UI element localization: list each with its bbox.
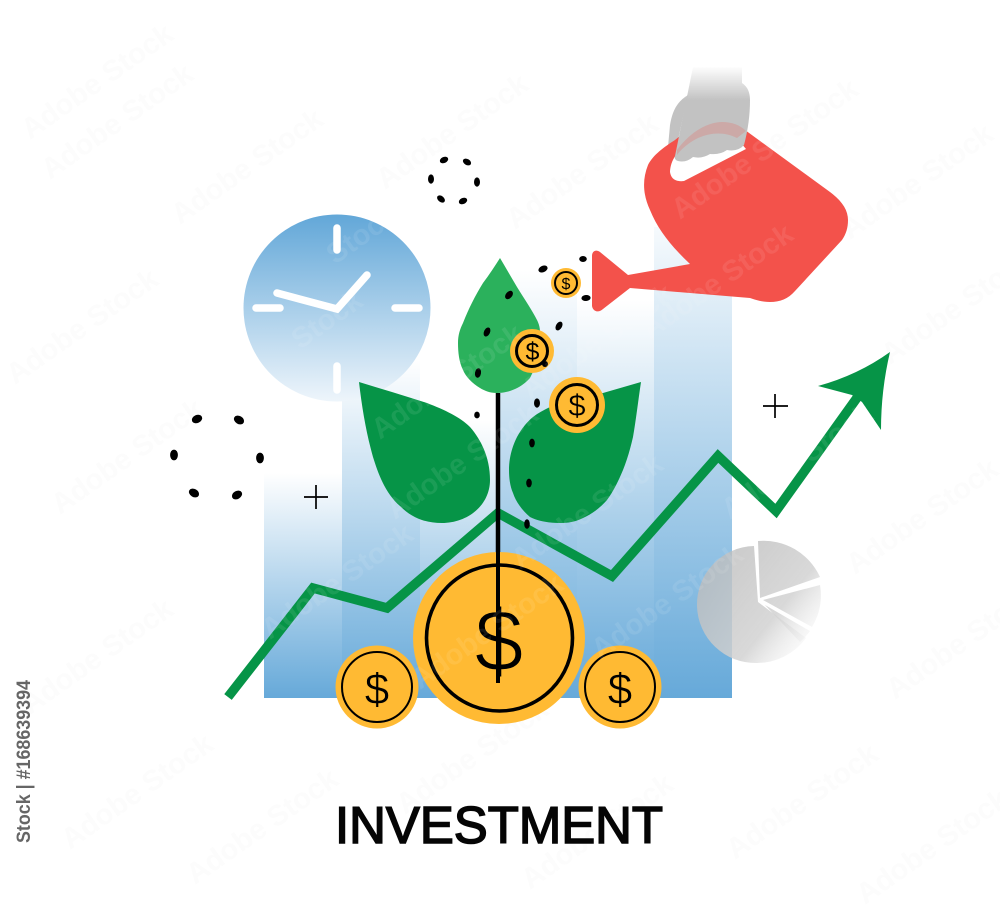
top leaf — [458, 258, 540, 393]
plant stem — [496, 393, 500, 560]
watermark: faint stock marks on background: Adobe Stock — [46, 392, 210, 521]
watermark: faint stock marks over artwork: Adobe Stock — [666, 97, 830, 226]
growth arrow line chart — [228, 352, 890, 697]
bar chart backdrop — [264, 227, 732, 698]
icon: pie chart — [697, 541, 821, 663]
watermark: faint stock marks over artwork: Adobe Stock — [716, 397, 880, 526]
hand gripping handle — [675, 67, 750, 162]
watermark: faint stock marks on background: Adobe Stock — [841, 452, 1000, 581]
icon: small coin right: $ — [608, 665, 632, 714]
watermark: faint stock marks on background: Adobe Stock — [836, 117, 1000, 246]
watermark: faint stock marks over artwork: Stock — [286, 284, 369, 356]
icon: falling coin small: $ — [562, 276, 571, 293]
watermark: faint stock marks over artwork: Adobe Stock — [636, 217, 800, 346]
watermark: faint stock marks on background: Adobe Stock — [371, 67, 535, 196]
plus sign: left — [304, 485, 328, 509]
watermark: faint stock marks over artwork: Adobe Stock — [381, 397, 545, 526]
watermark: faint stock marks on background: Adobe Stock — [166, 102, 330, 231]
title: INVESTMENT — [335, 797, 663, 855]
icon: watering can — [592, 67, 848, 311]
watermark: faint stock marks over artwork: Adobe Stock — [406, 567, 570, 696]
stock id caption: Stock | #168639394 — [13, 680, 35, 843]
right leaf — [509, 382, 641, 523]
decorative dot ring: top — [428, 155, 480, 206]
thumb behind can — [668, 95, 688, 147]
watermark: faint stock marks on background: Adobe Stock — [391, 692, 555, 821]
left leaf — [359, 382, 490, 523]
icon: plant leaves — [359, 258, 641, 523]
watermark: faint stock marks on background: Adobe Stock — [16, 17, 180, 146]
icon: large coin: $ — [475, 591, 523, 690]
watermark: faint stock marks over artwork: Adobe Stock — [586, 537, 750, 666]
falling dots — [474, 256, 591, 529]
icon: small coin left: $ — [365, 665, 389, 714]
watermark: faint stock marks over artwork: Adobe Stock — [256, 517, 420, 646]
handle strap over hand — [677, 122, 746, 155]
icon: falling coin medium: $ — [526, 338, 540, 366]
icon: falling coin medium — [510, 329, 554, 373]
watermark: faint stock marks over artwork: Adobe Stock — [366, 317, 530, 446]
plus sign: right — [763, 394, 788, 418]
watermark: faint stock marks on background: Adobe Stock — [36, 57, 200, 186]
watermark: faint stock marks on background: Adobe Stock — [701, 72, 865, 201]
icon: falling coin small — [551, 268, 581, 298]
watermark: faint stock marks on background: Adobe Stock — [181, 762, 345, 891]
watermark: faint stock marks over artwork: Stock — [321, 199, 404, 271]
can body and spout — [592, 122, 848, 311]
icon: falling coin large — [549, 377, 605, 433]
watermark: faint stock marks over artwork: Adobe Stock — [516, 277, 680, 406]
icon: falling coin large: $ — [568, 388, 586, 423]
watermark: faint stock marks on background: Adobe Stock — [721, 737, 885, 866]
watermark: faint stock marks on background: Adobe Stock — [16, 592, 180, 721]
icon: small coin right — [578, 646, 662, 728]
watermark: faint stock marks on background: Adobe Stock — [1, 262, 165, 391]
decorative dot ring: left — [170, 413, 264, 501]
watermark: faint stock marks over artwork — [256, 97, 880, 696]
icon: small coin left — [336, 646, 418, 728]
watermark: faint stock marks on background: Adobe Stock — [516, 767, 680, 896]
watermark: faint stock marks over artwork: Adobe Stock — [506, 447, 670, 576]
icon: clock — [244, 214, 430, 402]
icon: large coin — [413, 552, 585, 724]
watermark: faint stock marks on background: Adobe Stock — [56, 727, 220, 856]
watermark: faint stock marks on background: Adobe Stock — [501, 107, 665, 236]
